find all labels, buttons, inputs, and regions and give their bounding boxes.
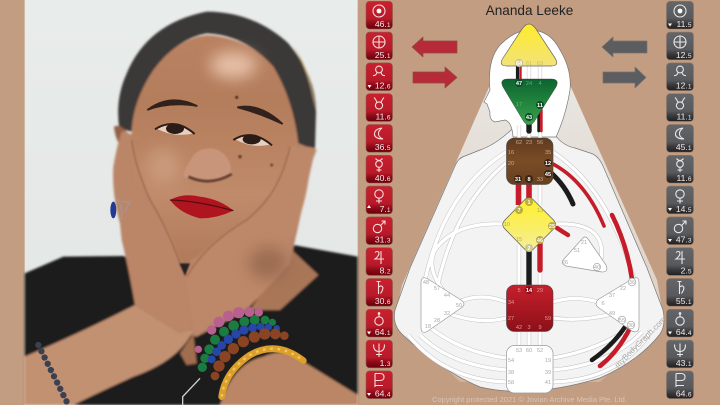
gate numbers: 9 xyxy=(538,325,542,331)
aura band xyxy=(394,85,664,382)
gate numbers: 25 xyxy=(549,224,555,230)
panel: design planets (red) xyxy=(366,1,392,399)
center: head xyxy=(501,24,557,66)
nose, moles and hand creases xyxy=(132,96,290,277)
tile: uranus 64.1 xyxy=(366,309,392,337)
gate numbers: 30 xyxy=(628,323,634,329)
gate numbers: 40 xyxy=(594,265,600,271)
tile: mercury 11.6: 11.6 xyxy=(677,173,692,183)
gate numbers: 11 xyxy=(537,103,543,109)
gate numbers: 60 xyxy=(526,348,532,354)
inactive channels xyxy=(408,65,652,382)
gate numbers: 32 xyxy=(444,311,450,317)
bodygraph chart xyxy=(394,24,668,393)
gate numbers: 7 xyxy=(517,208,521,214)
tile: moon 36.5: 36.5 xyxy=(375,142,391,152)
tile: saturn 30.6 xyxy=(366,278,392,306)
gate numbers: 18 xyxy=(425,324,431,330)
gate numbers: 24 xyxy=(526,81,532,87)
tile: moon 45.1: 45.1 xyxy=(676,142,692,152)
gate numbers: 19 xyxy=(545,358,551,364)
gate numbers: 29 xyxy=(537,288,543,294)
gate numbers: 6 xyxy=(601,301,605,307)
arrow: red right xyxy=(413,67,457,88)
gate numbers: 26 xyxy=(562,260,568,266)
gate numbers: 54 xyxy=(508,358,514,364)
gate numbers: 1 xyxy=(527,200,531,206)
gate numbers: 21 xyxy=(581,240,587,246)
wrist bead bracelet xyxy=(38,345,68,405)
tile: pluto 64.4 xyxy=(366,371,392,399)
gate highlights xyxy=(514,59,636,329)
gate numbers: 43 xyxy=(526,115,532,121)
gate numbers: 10 xyxy=(504,222,510,228)
tile: moon 36.5 xyxy=(366,124,392,152)
tile: neptune 43.1 xyxy=(666,340,694,368)
watermark: myBodyGraph.com xyxy=(613,315,668,370)
tile: north node 12.1: 12.1 xyxy=(676,81,692,91)
center: root xyxy=(506,346,553,393)
gate numbers: 4 xyxy=(538,81,542,87)
left eye xyxy=(155,123,195,135)
right eye xyxy=(233,134,272,146)
gate numbers: 12 xyxy=(545,161,551,167)
tile: south node 11.1: 11.1 xyxy=(677,111,692,121)
gate numbers: 41 xyxy=(545,380,551,386)
title: Ananda Leeke xyxy=(486,3,573,18)
tile: venus 14.5 xyxy=(666,186,694,214)
gate numbers: 31 xyxy=(515,177,521,183)
gate numbers: 39 xyxy=(545,370,551,376)
gate numbers: 46 xyxy=(537,238,543,244)
gate numbers: 57 xyxy=(434,286,440,292)
tile: earth 25.1: 25.1 xyxy=(375,50,391,60)
gate numbers: 64 xyxy=(516,61,523,67)
gate numbers: 63 xyxy=(537,61,543,67)
gate numbers: 55 xyxy=(619,318,625,324)
center: g identity xyxy=(503,198,556,252)
gate numbers: 3 xyxy=(527,325,531,331)
tile: saturn 55.1 xyxy=(666,278,694,306)
gate numbers: 48 xyxy=(423,280,429,286)
tile: saturn 55.1: 55.1 xyxy=(676,296,692,306)
center: solar plexus xyxy=(596,278,639,332)
tile: moon 45.1 xyxy=(666,124,694,152)
tile: pluto 64.6 xyxy=(666,371,694,399)
tile: north node 12.6: 12.6 xyxy=(375,81,391,91)
tile: uranus 64.1: 64.1 xyxy=(375,327,391,337)
tile: north node 12.1 xyxy=(666,63,694,91)
tile: mars 47.3: 47.3 xyxy=(676,235,692,245)
gate numbers: 53 xyxy=(516,348,522,354)
center: sacral xyxy=(506,285,553,332)
tile: neptune 1.3 xyxy=(366,340,392,368)
tile: mercury 40.6 xyxy=(366,155,392,183)
gate numbers: 36 xyxy=(629,280,635,286)
gate numbers: 45 xyxy=(545,172,551,178)
gate numbers: 17 xyxy=(516,102,522,108)
tile: venus 14.5: 14.5 xyxy=(676,204,692,214)
bracelet beads xyxy=(195,307,303,397)
tile: jupiter 8.2: 8.2 xyxy=(380,265,391,275)
tile: mars 31.3 xyxy=(366,217,392,245)
center: spleen xyxy=(421,278,464,332)
gate numbers: 49 xyxy=(609,311,615,317)
left eyebrow xyxy=(147,100,197,110)
tile: venus 7.1 xyxy=(366,186,392,214)
cheek highlight xyxy=(147,148,180,185)
arrow: grey left xyxy=(602,37,647,57)
forehead highlight xyxy=(210,52,257,78)
tile: sun 11.5: 11.5 xyxy=(677,19,692,29)
gate numbers: 51 xyxy=(574,248,580,254)
tile: earth 25.1 xyxy=(366,32,392,60)
gate numbers: 52 xyxy=(537,348,543,354)
arrow: red left xyxy=(412,37,457,57)
ring xyxy=(110,198,130,222)
tile: mercury 11.6 xyxy=(666,155,694,183)
gate numbers: 35 xyxy=(545,150,551,156)
gate numbers: 14 xyxy=(526,288,533,294)
gate numbers: 56 xyxy=(537,140,543,146)
photo: portrait of Ananda Leeke xyxy=(25,0,358,405)
necklace xyxy=(183,378,200,405)
gate numbers: 22 xyxy=(620,286,626,292)
tile: sun 46.1: 46.1 xyxy=(375,19,391,29)
tile: uranus 64.4: 64.4 xyxy=(676,327,692,337)
right hand shadow xyxy=(248,247,288,280)
tile: earth 12.5 xyxy=(666,32,694,60)
tile: mars 47.3 xyxy=(666,217,694,245)
center: ego xyxy=(562,237,607,272)
gate numbers: 50 xyxy=(456,303,462,309)
gate numbers xyxy=(423,61,635,386)
panel: personality planets (grey) xyxy=(666,1,694,399)
arrow: grey right xyxy=(603,67,646,88)
tile: south node 11.1 xyxy=(666,94,694,121)
gate numbers: 61 xyxy=(526,61,532,67)
tile: earth 12.5: 12.5 xyxy=(676,50,692,60)
tile: venus 7.1: 7.1 xyxy=(380,204,391,214)
tile: uranus 64.4 xyxy=(666,309,694,337)
tile: jupiter 2.5: 2.5 xyxy=(681,265,692,275)
right eyebrow xyxy=(237,106,283,124)
gate numbers: 47 xyxy=(516,81,522,87)
center: throat xyxy=(506,138,553,184)
gate numbers: 13 xyxy=(537,208,543,214)
gate numbers: 2 xyxy=(527,246,531,252)
gate numbers: 23 xyxy=(526,140,532,146)
tile: jupiter 8.2 xyxy=(366,248,392,275)
body silhouette xyxy=(394,130,664,391)
tile: mercury 40.6: 40.6 xyxy=(375,173,391,183)
gate numbers: 37 xyxy=(609,293,615,299)
tile: pluto 64.4: 64.4 xyxy=(375,389,391,399)
gate numbers: 58 xyxy=(508,380,514,386)
gate numbers: 42 xyxy=(516,325,522,331)
gate numbers: 8 xyxy=(527,177,531,183)
tile: sun 46.1 xyxy=(366,1,392,29)
head silhouette xyxy=(484,30,570,137)
gate numbers: 28 xyxy=(434,318,440,324)
tile: mars 31.3: 31.3 xyxy=(375,235,391,245)
tile: saturn 30.6: 30.6 xyxy=(375,296,391,306)
gate numbers: 33 xyxy=(537,177,543,183)
tile: neptune 1.3: 1.3 xyxy=(380,358,391,368)
gate numbers: 27 xyxy=(508,316,514,322)
tile: jupiter 2.5 xyxy=(666,248,694,275)
lips xyxy=(170,195,233,218)
tile: south node 11.6 xyxy=(366,94,392,121)
gate numbers: 38 xyxy=(508,370,514,376)
gate numbers: 62 xyxy=(516,140,522,146)
gate numbers: 15 xyxy=(516,237,522,243)
tile: south node 11.6: 11.6 xyxy=(376,111,391,121)
gate numbers: 5 xyxy=(517,288,521,294)
gate numbers: 16 xyxy=(508,150,514,156)
active channels xyxy=(518,66,632,366)
gate numbers: 44 xyxy=(444,293,450,299)
tile: neptune 43.1: 43.1 xyxy=(676,358,692,368)
gate numbers: 34 xyxy=(508,300,514,306)
gate numbers: 59 xyxy=(545,316,551,322)
tile: sun 11.5 xyxy=(666,1,694,29)
copyright: Copyright protected 2021 © Jovian Archive Media Pte. Ltd. xyxy=(432,395,627,404)
center: ajna xyxy=(502,79,557,125)
gate numbers: 20 xyxy=(508,161,514,167)
tile: north node 12.6 xyxy=(366,63,392,91)
tile: pluto 64.6: 64.6 xyxy=(676,389,692,399)
